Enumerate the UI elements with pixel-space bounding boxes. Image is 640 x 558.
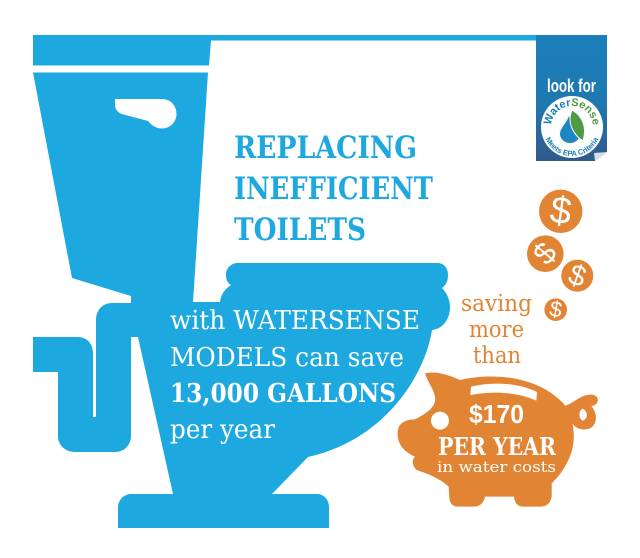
WaterSense badge: [536, 35, 607, 161]
toilet illustration: [33, 35, 536, 528]
pig silhouette: [398, 373, 598, 507]
savings text on bowl: [170, 306, 420, 445]
pig savings text: PER YEAR: [438, 432, 557, 461]
savings text on bowl: with WATERSENSE: [170, 306, 420, 336]
pig savings text: $170: [469, 399, 524, 429]
heading: INEFFICIENT: [234, 171, 433, 207]
saving more than text: more: [469, 317, 524, 343]
look for label: look for: [547, 76, 596, 96]
savings text on bowl: per year: [170, 415, 276, 445]
coin 4: $: [548, 296, 564, 323]
saving more than text: saving: [461, 291, 532, 317]
WaterSense logo: [541, 96, 603, 158]
eye: [431, 412, 449, 430]
piggy bank: [398, 373, 598, 507]
savings text on bowl: MODELS can save: [170, 343, 404, 373]
page curl: [594, 152, 607, 161]
toilet tank, pipe and bowl: [33, 72, 450, 528]
coin slot: [470, 384, 537, 401]
coin 3: $: [564, 258, 590, 294]
toilet lid and top bar: [33, 35, 536, 66]
pig savings text: in water costs: [437, 458, 556, 476]
heading: REPLACING: [234, 130, 417, 166]
saving more than text: than: [473, 343, 521, 369]
savings text on bowl: 13,000 GALLONS: [170, 379, 396, 409]
heading: TOILETS: [234, 212, 366, 248]
WaterSense logo: WaterSense: [543, 98, 598, 125]
heading: [234, 130, 433, 248]
coin 1: $: [547, 189, 574, 234]
tank handle: [115, 99, 176, 128]
coins: [526, 189, 593, 323]
WaterSense logo: Meets EPA Criteria: [546, 136, 598, 156]
saving more than text: [461, 291, 532, 369]
coin 2: $: [526, 236, 564, 271]
pig savings text: [437, 399, 557, 476]
badge background: [536, 35, 607, 161]
